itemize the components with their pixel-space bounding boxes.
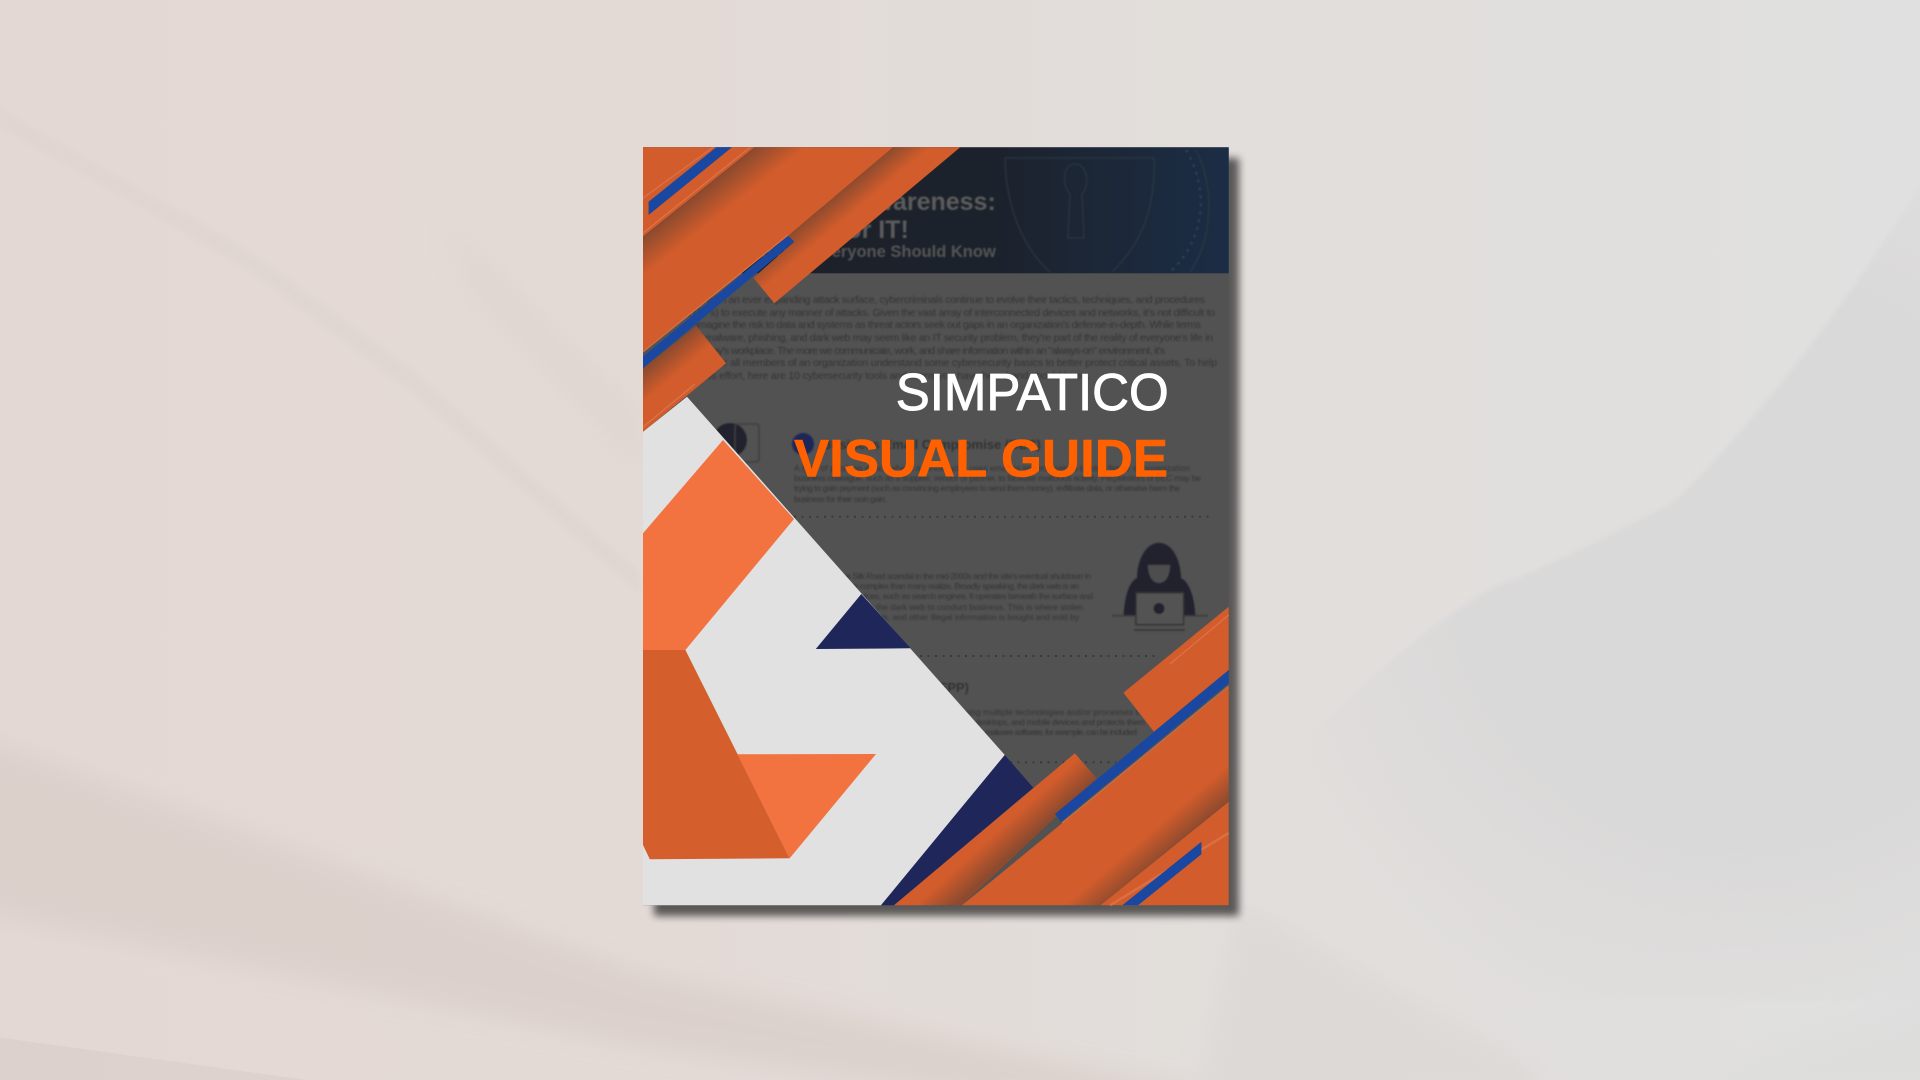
page intro paragraph: vital for all members of an organization understand some cybersecurity basics to better protect critical assets. To help xyxy=(695,357,1217,369)
icon: hooded hacker with laptop xyxy=(1112,543,1208,631)
light orange block xyxy=(643,440,794,650)
dotted divider xyxy=(1010,761,1116,763)
light orange triangle xyxy=(738,754,876,858)
page intro paragraph: like malware, phishing, and dark web may seem like an IT security problem, they're part of the reality of everyone's life in xyxy=(688,332,1213,344)
blue stripe middle xyxy=(1055,670,1229,822)
dotted divider xyxy=(794,516,1209,518)
section 1: BEC: Business Email Compromise (BEC) xyxy=(822,437,1041,452)
corner stripe xyxy=(643,147,755,237)
navy triangle lower xyxy=(881,755,1033,905)
title: VISUAL GUIDE: VISUAL GUIDE xyxy=(794,430,1168,489)
page title text: Cybersecurity Awareness: xyxy=(683,188,996,216)
large band xyxy=(643,147,893,352)
section 3: EPP xyxy=(806,680,1151,737)
page header band xyxy=(643,147,1229,273)
section 1: BEC xyxy=(713,423,1201,504)
section 2: dark web: tools, and other illegal information is bought and sold by xyxy=(870,612,1080,622)
page intro paragraph xyxy=(688,294,1217,382)
section 1: BEC: business for their own gain. xyxy=(794,494,887,504)
section 2: dark web: more complex than many realize. Broadly speaking, the dark web is an xyxy=(840,581,1079,591)
page intro paragraph: With an ever expanding attack surface, cybercriminals continue to evolve their tactics, techniques, and procedures xyxy=(706,294,1205,306)
icon: person and phone xyxy=(713,423,759,462)
page title text xyxy=(683,188,996,261)
title: SIMPATICO: SIMPATICO xyxy=(896,364,1169,422)
bottom-right orange stripes xyxy=(894,607,1229,905)
section 2: dark web: the Silk Road scandal in the mid-2000s and the site's eventual shutdown in xyxy=(840,571,1091,581)
section 3: EPP: malware software, for example, can be included xyxy=(985,727,1137,737)
upper-right piece xyxy=(1123,607,1229,732)
large band xyxy=(962,687,1229,905)
shield with keyhole xyxy=(1005,150,1209,272)
section 2: dark web: services, such as search engines. It operates beneath the surface and xyxy=(850,591,1093,601)
right band xyxy=(753,147,960,303)
navy triangle upper xyxy=(816,594,911,649)
blue stripe middle xyxy=(643,236,794,368)
section 1: BEC: A type of phishing attack where a threat actor uses email to impersonate a trusted figure or organization xyxy=(794,463,1190,473)
short piece xyxy=(643,326,726,432)
corner piece xyxy=(1100,802,1229,905)
section 3: EPP: using multiple technologies and/or processes that xyxy=(960,707,1151,717)
section 2: dark web xyxy=(840,571,1093,622)
page title text: 10 Terms Everyone Should Know xyxy=(736,243,996,261)
page intro paragraph: in this effort, here are 10 cybersecurity tools and terms you have heard and should know. xyxy=(690,370,1090,382)
page intro paragraph: imagine the risk to data and systems as threat actors seek out gaps in an organization's defense-in-depth. While terms xyxy=(696,319,1201,331)
page title text: Not Just For IT! xyxy=(724,216,909,244)
section 1: BEC: trying to gain payment (such as convincing employees to send them money), exfiltrate data, or otherwise harm the xyxy=(794,483,1180,493)
section 1: BEC: business colleague, such as a supplier, vendor or partner, to facilitate malicious activity. Perpetrators of BEC may be xyxy=(794,473,1201,483)
blue stripe bottom xyxy=(1122,842,1201,905)
cover drop shadow xyxy=(654,158,1239,916)
cover: dark page xyxy=(643,147,1229,905)
lower-left piece xyxy=(894,753,1097,905)
top-left orange stripes xyxy=(643,147,960,432)
dark orange block xyxy=(643,650,790,859)
section 3: EPP: desktops, and mobile devices and protects them xyxy=(975,717,1145,727)
icon: number badge xyxy=(792,433,814,455)
page intro paragraph: today's workplace. The more we communicate, work, and share information within an "always-on" environment, it's xyxy=(700,345,1165,357)
white S-shape panel xyxy=(643,397,1005,905)
section 3: EPP: Endpoint Protection (EPP) xyxy=(806,680,969,695)
dotted divider xyxy=(905,655,1160,657)
section 2: dark web: use the dark web to conduct business. This is where stolen xyxy=(860,602,1083,612)
page intro paragraph: (TTPs) to execute any manner of attacks. Given the vast array of interconnected devices and networks, it's not difficult to xyxy=(688,307,1215,319)
blue stripe top xyxy=(649,147,732,215)
